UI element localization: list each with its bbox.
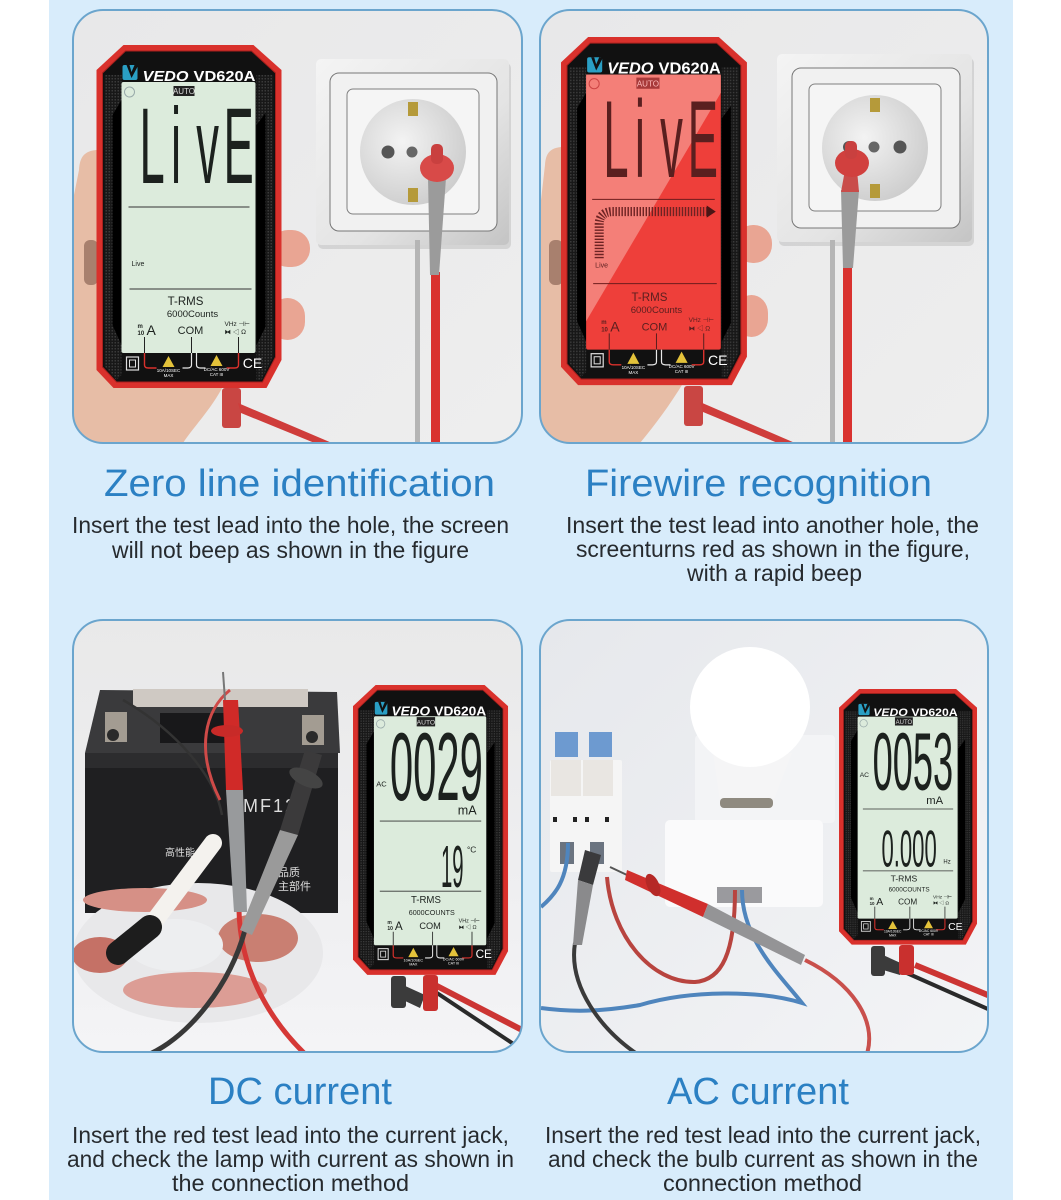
main reading: E (224, 85, 254, 206)
multimeter: Live reading: VD620A (194, 68, 256, 85)
LCD screen (374, 716, 486, 945)
main reading: L (140, 85, 165, 206)
multimeter: Live reading: VEDO (142, 68, 189, 85)
multimeter: red Live reading: 10A/10SEC (622, 365, 646, 370)
red LCD screen (586, 75, 721, 350)
multimeter: Live reading: A (146, 322, 156, 338)
multimeter: red Live reading: CAT III (675, 369, 688, 374)
meter lead connectors (871, 945, 990, 1010)
meter lead connector (684, 386, 795, 446)
multimeter: red Live reading: T-RMS (631, 291, 668, 304)
text: AC description: Insert the red test lead into the current jack, (545, 1122, 981, 1148)
text: firewire description (566, 512, 979, 586)
multimeter: DC reading: DC/AC 600V (443, 957, 465, 961)
multimeter: DC reading: COM (419, 921, 441, 931)
meter lead connectors (391, 975, 522, 1045)
text: firewire description: screenturns red as shown in the figure, (576, 536, 970, 562)
multimeter: DC reading: ⧓ ◁ Ω (459, 924, 477, 931)
multimeter: red Live reading: Live (595, 262, 608, 269)
battery: 主部件 (278, 879, 311, 893)
multimeter: DC reading: AC (376, 779, 387, 788)
panel: DC current photo (72, 620, 522, 1054)
multimeter: DC reading: m (387, 920, 392, 926)
multimeter: DC reading: CE (476, 948, 492, 961)
multimeter: Live reading (96, 45, 282, 388)
text: DC description: Insert the red test lead into the current jack, (72, 1122, 509, 1148)
multimeter: DC reading: MAX (409, 963, 418, 967)
text: firewire description: with a rapid beep (686, 560, 862, 586)
text: AC description: and check the bulb current as shown in the (548, 1146, 978, 1172)
text: DC description: and check the lamp with current as shown in (67, 1146, 514, 1172)
multimeter: AC reading: m (870, 896, 874, 901)
black test probe (150, 750, 326, 1054)
LCD screen (122, 82, 256, 353)
multimeter: Live reading: COM (178, 325, 203, 337)
multimeter: AC reading: Hz (943, 859, 951, 865)
LED strip reel (72, 883, 323, 1023)
multimeter: Live reading: 6000Counts (167, 309, 218, 320)
multimeter: DC reading: 10 (387, 926, 393, 932)
multimeter: DC reading: 19 (441, 835, 464, 900)
hand holding meter (73, 150, 226, 443)
multimeter: DC reading: 6000COUNTS (409, 908, 455, 917)
multimeter: DC reading: AUTO (417, 720, 435, 727)
multimeter: Live reading: Live (132, 261, 144, 268)
battery (85, 689, 340, 913)
wall socket (316, 59, 511, 249)
multimeter: AC reading: VD620A (911, 707, 958, 719)
circuit breaker (550, 732, 622, 872)
main reading: v (196, 85, 219, 206)
multimeter: AC reading: AC (860, 772, 869, 779)
multimeter: DC reading (353, 685, 508, 975)
main reading: i (635, 78, 645, 201)
multimeter: red Live reading: DC/AC 600V (669, 364, 695, 369)
multimeter: Live reading: MAX (164, 373, 173, 378)
wiring (541, 843, 869, 1054)
multimeter: AC reading: 0.000 (882, 820, 937, 878)
multimeter: AC reading: A (876, 897, 883, 908)
multimeter: red Live reading: m (601, 320, 607, 326)
light bulb (690, 647, 810, 808)
text: AC description (545, 1122, 981, 1196)
red test probe (206, 672, 305, 1054)
multimeter: DC reading: VD620A (434, 704, 486, 718)
multimeter: AC reading: T-RMS (891, 873, 918, 883)
text: zero line description: will not beep as shown in the figure (111, 537, 469, 563)
main reading: i (171, 85, 181, 206)
multimeter: red Live reading: A (610, 318, 620, 334)
multimeter: Live reading: VHz ⊣⊢ (224, 321, 250, 328)
multimeter: AC reading: MAX (889, 933, 897, 937)
multimeter: AC reading: 10A/10SEC (884, 930, 902, 934)
multimeter: DC reading: VEDO (392, 704, 430, 718)
multimeter: DC reading: 10A/10SEC (404, 958, 423, 962)
red test probe in socket (420, 144, 454, 443)
multimeter: DC reading: 0029 (390, 714, 483, 821)
main reading: E (688, 78, 718, 201)
multimeter: AC reading: DC/AC 600V (919, 929, 939, 933)
multimeter: Live reading: ⧓ ◁ Ω (224, 328, 246, 336)
main reading: v (660, 78, 683, 201)
multimeter: AC reading: 10 (870, 901, 875, 906)
wall socket (777, 54, 974, 246)
test lead shadow (830, 240, 835, 443)
text: DC description (67, 1122, 514, 1196)
panel: zero line identification photo (73, 10, 522, 446)
multimeter: Live reading: T-RMS (168, 296, 204, 308)
strip wires and tape (118, 700, 222, 953)
multimeter: DC reading: T-RMS (411, 895, 441, 906)
multimeter: DC reading: VHz ⊣⊢ (459, 917, 480, 924)
battery: 高性能 (165, 846, 195, 859)
panel: firewire recognition photo (540, 10, 988, 446)
multimeter: red Live reading: 6000Counts (631, 305, 682, 316)
red test probe in socket (835, 141, 869, 443)
multimeter: red Live reading: CE (708, 352, 728, 368)
multimeter: AC reading: ⧓ ◁ Ω (933, 900, 949, 906)
multimeter: DC reading: °C (467, 844, 476, 854)
multimeter: AC reading: CE (948, 922, 963, 933)
multimeter: red Live reading: MAX (628, 370, 638, 375)
multimeter: AC reading: 6000COUNTS (889, 887, 930, 894)
multimeter: DC reading: CAT III (448, 962, 459, 966)
text: AC description: connection method (663, 1170, 862, 1196)
multimeter: red Live reading: VEDO (607, 60, 654, 78)
multimeter: Live reading: m (138, 324, 143, 330)
text: zero line description: Insert the test lead into the hole, the screen (72, 512, 509, 538)
multimeter: Live reading: DC/AC 600V (204, 367, 229, 372)
multimeter: AC reading: VHz ⊣⊢ (933, 893, 952, 900)
black test probe (573, 850, 601, 945)
main reading: L (603, 78, 629, 201)
meter lead connector (222, 388, 332, 446)
multimeter: red Live reading: ⧓ ◁ Ω (689, 324, 710, 332)
battery: MF12 (243, 796, 297, 816)
multimeter: red Live reading: 10 (601, 327, 609, 333)
panel: AC current photo (540, 620, 990, 1054)
live strength arrow (599, 205, 716, 258)
multimeter: Live reading: 10 (138, 331, 145, 337)
multimeter: AC reading (839, 689, 977, 945)
multimeter: red Live reading: VHz ⊣⊢ (689, 317, 714, 324)
multimeter: AC reading: VEDO (873, 707, 908, 719)
text: zero line description (72, 512, 509, 563)
heading: AC current: AC current (667, 1071, 849, 1113)
test lead shadow (415, 240, 420, 443)
multimeter: AC reading: mA (926, 795, 944, 807)
multimeter: Live reading: AUTO (173, 87, 195, 96)
multimeter: red Live reading (561, 37, 747, 385)
multimeter: AC reading: AUTO (896, 720, 912, 726)
heading: DC current: DC current (208, 1071, 392, 1113)
battery: 品质 (278, 866, 300, 879)
multimeter: red Live reading: COM (642, 321, 667, 333)
multimeter: AC reading: COM (898, 897, 917, 906)
LCD screen (858, 717, 958, 919)
text: DC description: the connection method (172, 1170, 409, 1196)
multimeter: red Live reading: VD620A (658, 60, 721, 78)
multimeter: DC reading: A (395, 920, 403, 933)
heading: zero line: Zero line identification (104, 463, 495, 505)
heading: firewire: Firewire recognition (585, 463, 932, 505)
multimeter: red Live reading: AUTO (637, 80, 659, 89)
multimeter: Live reading: CE (243, 355, 262, 371)
red test probe (610, 867, 805, 965)
text: firewire description: Insert the test lead into another hole, the (566, 512, 979, 538)
multimeter: DC reading: mA (458, 803, 477, 817)
multimeter: Live reading: CAT III (210, 372, 223, 377)
multimeter: AC reading: 0053 (873, 717, 953, 808)
lamp holder (665, 735, 835, 907)
hand holding meter (541, 147, 685, 443)
multimeter: Live reading: 10A/10SEC (157, 368, 181, 373)
multimeter: AC reading: CAT III (923, 933, 934, 937)
